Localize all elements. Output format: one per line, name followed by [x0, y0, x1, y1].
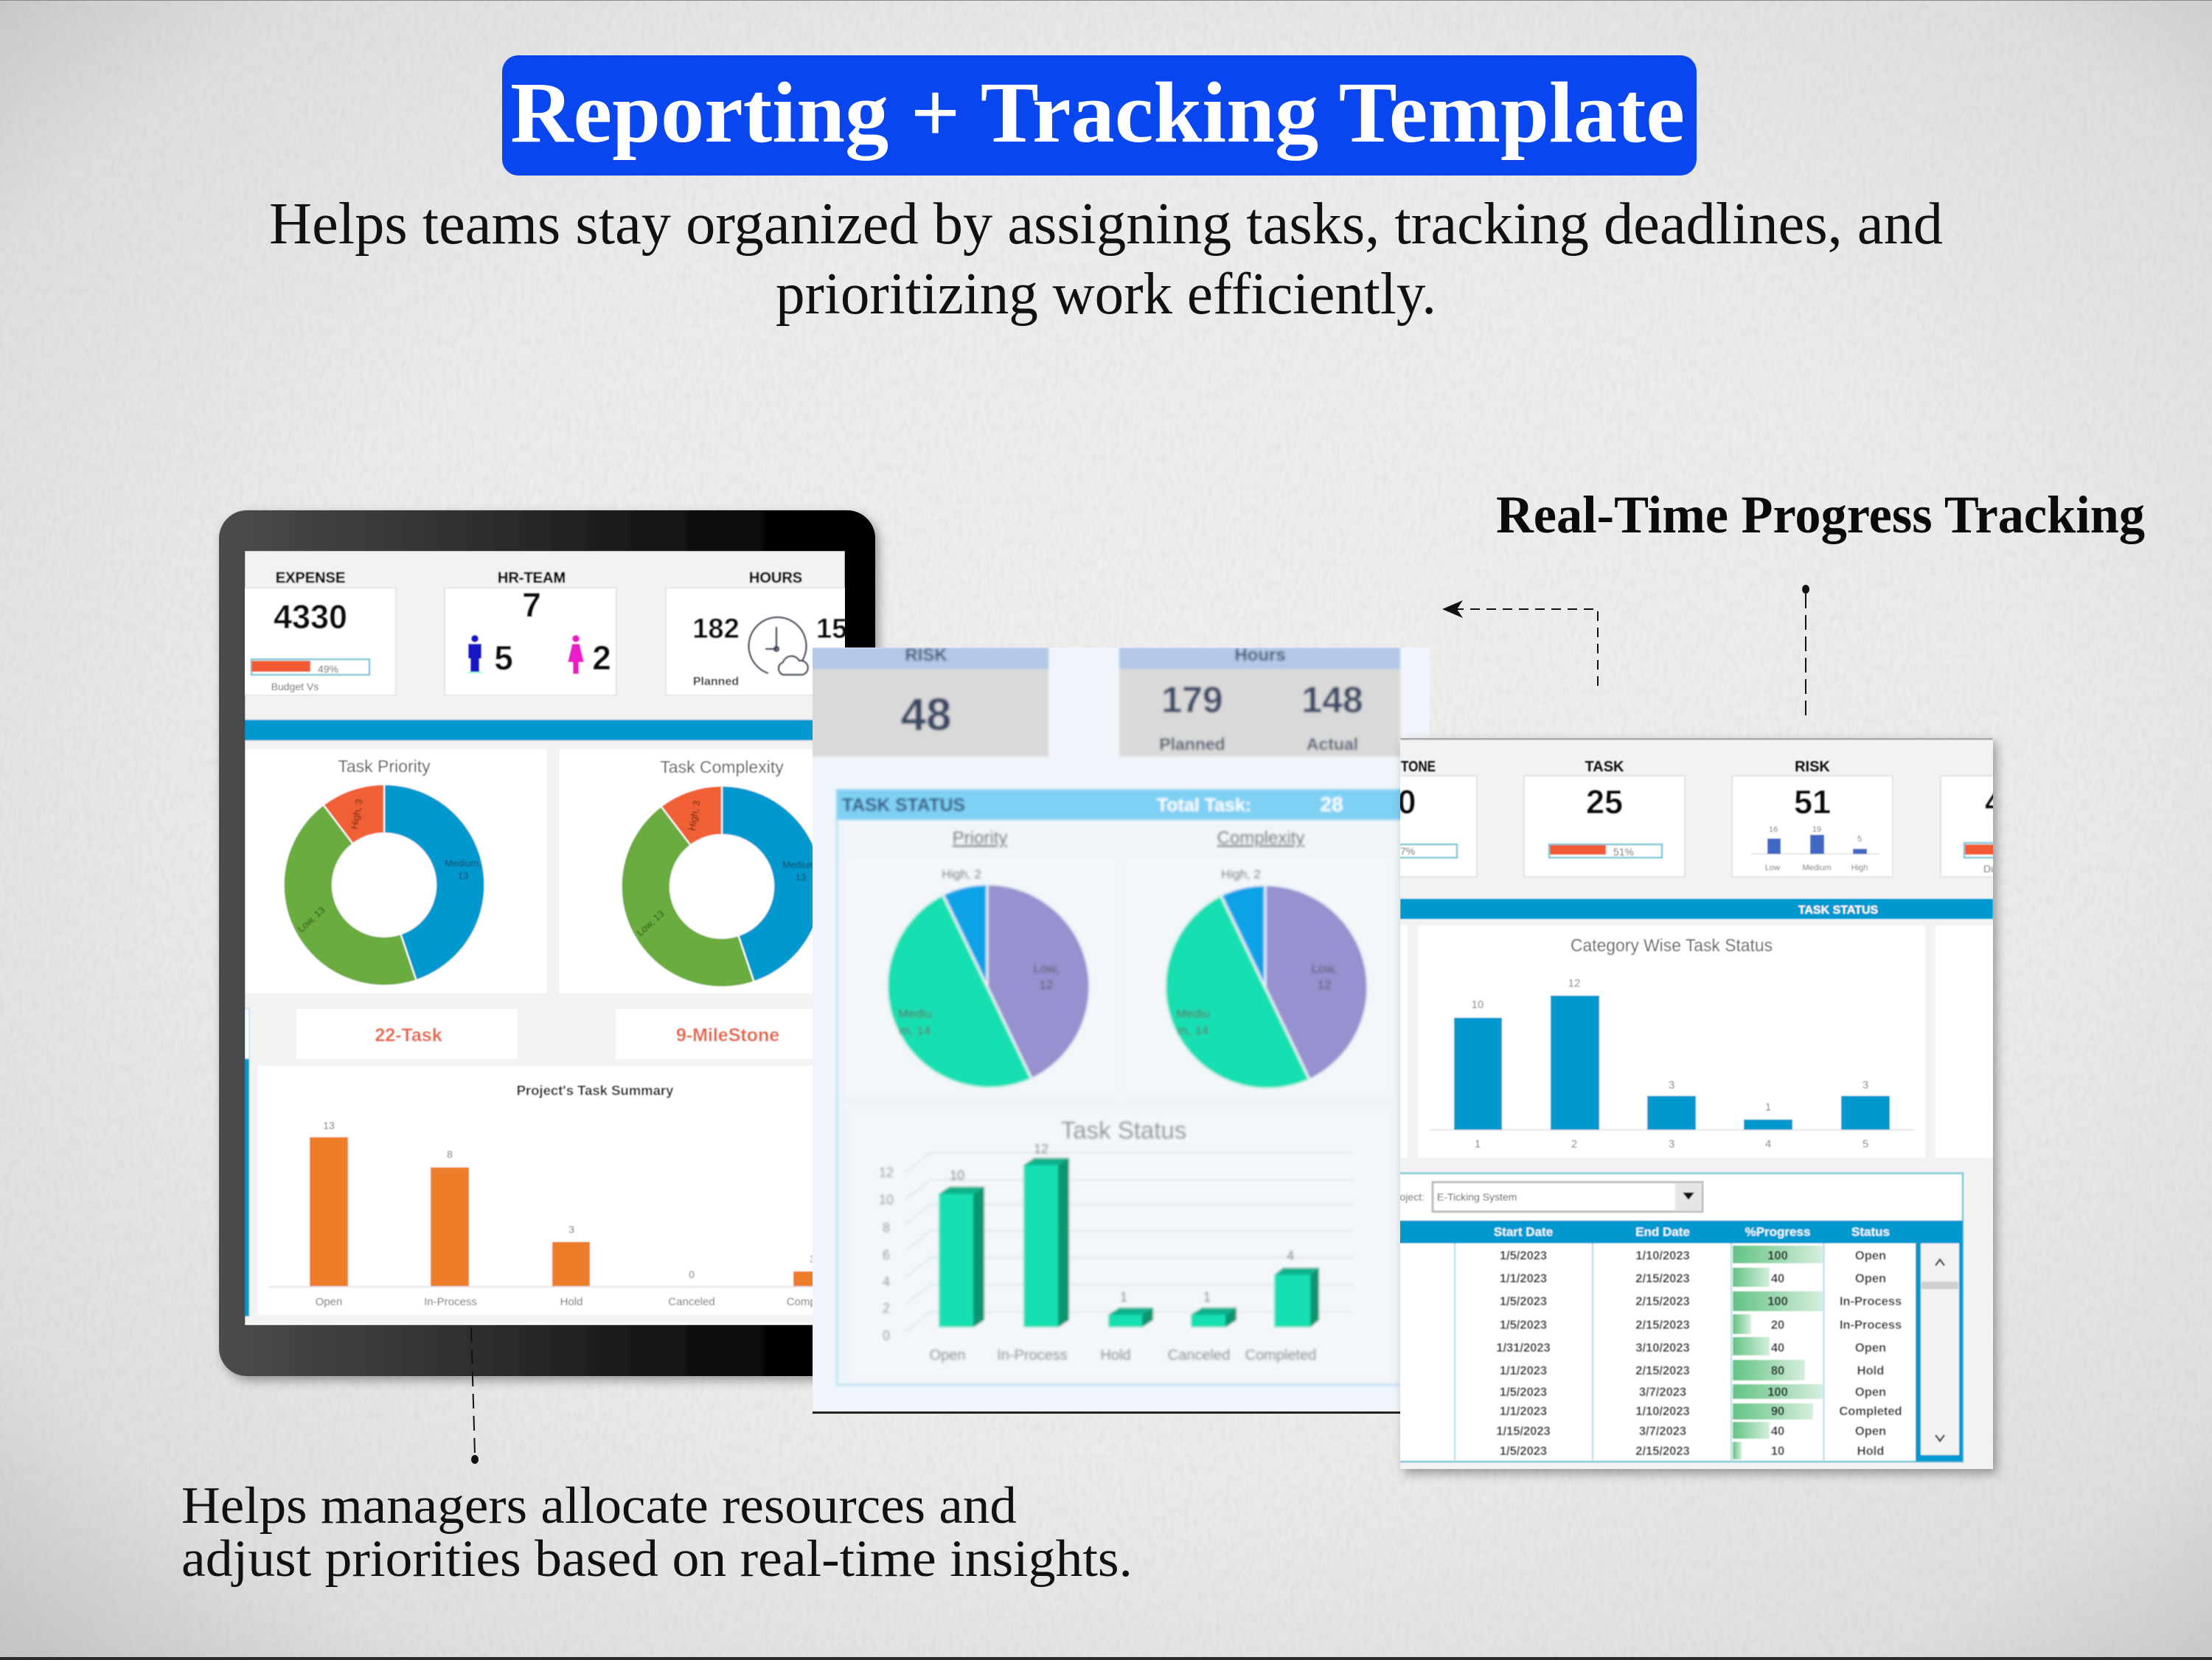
- table rows: 100: [1767, 1295, 1788, 1308]
- KPI: risk with mini bars: 19: [1812, 825, 1821, 834]
- KPI: task: 51%: [1613, 846, 1634, 858]
- 3D bar chart: task status: 8: [883, 1220, 890, 1235]
- caption: helps managers: Helps managers allocate resources and: [181, 1477, 1017, 1535]
- KPI: hours: 148: [1301, 679, 1363, 720]
- complexity pie chart: Low,: [1312, 962, 1337, 976]
- card: expense: EXPENSE: [276, 570, 345, 586]
- KPI: task: [1524, 759, 1685, 877]
- 3D bar chart: task status: Open: [930, 1347, 965, 1364]
- panel: task priority donut: [245, 749, 547, 993]
- KPI: task: TASK: [1585, 759, 1624, 775]
- panel: category wise bar chart: 3: [1863, 1079, 1868, 1091]
- panel: project's task summary bar chart: 3: [810, 1253, 815, 1265]
- table rows: 2/15/2023: [1635, 1445, 1690, 1458]
- table rows: 1/1/2023: [1500, 1405, 1547, 1418]
- panel: project's task summary bar chart: 8: [447, 1148, 453, 1160]
- table rows: 1/5/2023: [1500, 1295, 1547, 1308]
- table rows: 1/1/2023: [1500, 1364, 1547, 1378]
- panel: right dashboard: [1386, 737, 2007, 1469]
- arrow: dashed connector to middle panel: [1442, 600, 1598, 686]
- KPI: hours: 179: [1161, 679, 1223, 720]
- 3D bar chart: task status: 4: [883, 1274, 890, 1289]
- 3D bar chart: task status: Completed: [1245, 1347, 1316, 1364]
- priority pie chart: 12: [1040, 978, 1053, 992]
- 3D bar chart: task status: 1: [1203, 1290, 1211, 1305]
- KPI: risk with mini bars: 16: [1769, 825, 1778, 834]
- table rows: Open: [1855, 1249, 1886, 1263]
- table rows: 1/1/2023: [1500, 1272, 1547, 1285]
- panel: project task table: Project:: [1390, 1191, 1425, 1203]
- KPI: risk with mini bars: [1732, 759, 1893, 877]
- panel: project's task summary bar chart: In-Process: [424, 1296, 477, 1308]
- panel: task priority donut: Medium,: [445, 858, 481, 869]
- panel: project task table: Start Date: [1494, 1225, 1553, 1239]
- KPI: hours: Planned: [1159, 735, 1225, 754]
- panel: task complexity donut: High, 3: [686, 799, 702, 832]
- icon: male figure: [467, 635, 482, 673]
- 3D bar chart: task status: 10: [950, 1168, 964, 1183]
- heading: real-time progress tracking: Real-Time Progress Tracking: [1496, 485, 2145, 544]
- KPI: milestone: TONE: [1401, 759, 1436, 775]
- card: task count: [296, 1009, 518, 1059]
- 3D bar chart: task status: 4: [1287, 1249, 1294, 1263]
- table rows: 2/15/2023: [1635, 1295, 1690, 1308]
- panel: category wise bar chart: [1418, 925, 1925, 1158]
- 3D bar chart: task status: Canceled: [1168, 1347, 1230, 1364]
- table rows: In-Process: [1840, 1295, 1902, 1308]
- priority pie chart: Mediu: [898, 1007, 932, 1021]
- KPI: hours: Hours: [1234, 645, 1286, 665]
- card: expense: [243, 570, 396, 695]
- table rows: 2/15/2023: [1635, 1319, 1690, 1332]
- panel: project's task summary bar chart: 3: [568, 1223, 574, 1235]
- KPI: hours: [1119, 645, 1400, 757]
- complexity pie chart: m, 14: [1178, 1024, 1208, 1038]
- 3D bar chart: task status: Hold: [1100, 1347, 1131, 1364]
- complexity pie chart: 12: [1318, 978, 1331, 992]
- KPI: risk with mini bars: RISK: [1795, 759, 1830, 775]
- table rows: 1/5/2023: [1500, 1249, 1547, 1263]
- progress bars: [1733, 1246, 1823, 1459]
- KPI: risk with mini bars: 51: [1794, 783, 1831, 821]
- panel: task complexity donut: Medium,: [782, 859, 819, 870]
- panel: task priority donut: High, 3: [349, 798, 364, 830]
- 3D bar chart: task status: In-Process: [997, 1347, 1068, 1364]
- KPI: risk with mini bars: 5: [1857, 835, 1862, 844]
- KPI: risk: RISK: [905, 645, 947, 665]
- KPI: risk with mini bars: High: [1851, 864, 1868, 872]
- table rows: 2/15/2023: [1635, 1272, 1690, 1285]
- panel: category wise bar chart: 1: [1475, 1138, 1481, 1150]
- panel: project task table: End Date: [1635, 1225, 1690, 1239]
- table rows: 10: [1771, 1445, 1784, 1458]
- title banner: Reporting + Tracking Template: [510, 64, 1685, 161]
- KPI: risk: [811, 645, 1048, 757]
- tablet screen: [243, 551, 863, 1325]
- complexity pie chart: Mediu: [1176, 1007, 1210, 1021]
- tablet dashboard: [219, 510, 875, 1376]
- panel: category wise bar chart: 1: [1765, 1101, 1771, 1114]
- KPI: hours: Actual: [1307, 735, 1358, 754]
- section band: task status: TASK STATUS: [1798, 904, 1879, 917]
- table rows: Open: [1855, 1272, 1886, 1285]
- panel: project's task summary bar chart: Project's Task Summary: [517, 1083, 674, 1098]
- 3D bar chart: task status: 12: [879, 1165, 894, 1180]
- panel: project's task summary bar chart: 0: [689, 1268, 695, 1280]
- table rows: 40: [1771, 1341, 1784, 1355]
- panel: middle dashboard: [811, 645, 1430, 1414]
- table rows: 40: [1771, 1425, 1784, 1438]
- left edge accent: [245, 1009, 249, 1316]
- caption: helps managers: [181, 1477, 1133, 1588]
- section band: task status: [1400, 899, 1993, 919]
- card: hours: 182: [692, 614, 740, 645]
- panel: category wise bar chart: Category Wise Task Status: [1571, 936, 1773, 956]
- panel: task status box: Total Task:: [1157, 795, 1251, 816]
- panel: task complexity donut: Task Complexity: [660, 757, 784, 777]
- KPI: risk with mini bars: Medium: [1802, 864, 1832, 872]
- panel: project's task summary bar chart: Open: [316, 1296, 342, 1308]
- section band: [245, 720, 820, 740]
- panel: project's task summary bar chart: 13: [323, 1119, 335, 1131]
- panel: category wise bar chart: 12: [1568, 977, 1580, 990]
- card: HR team: [445, 570, 616, 695]
- panel: task priority donut: Low, 13: [295, 904, 327, 934]
- card: milestone count: 9-MileStone: [676, 1025, 779, 1046]
- panel: task complexity donut: Low, 13: [634, 908, 667, 938]
- table rows: 3/7/2023: [1639, 1386, 1686, 1399]
- card: hours: HOURS: [749, 570, 802, 586]
- subtitle: Helps teams stay organized by assigning tasks, tracking deadlines, and: [269, 192, 1943, 257]
- table rows: Open: [1855, 1425, 1886, 1438]
- table rows: Open: [1855, 1386, 1886, 1399]
- priority pie chart: High, 2: [942, 867, 981, 881]
- KPI: cut-off card: [1941, 776, 2007, 877]
- KPI: milestone: 0: [1397, 783, 1416, 821]
- panel: project's task summary bar chart: Canceled: [668, 1296, 715, 1308]
- panel: task complexity donut: 13: [796, 872, 806, 883]
- table rows: Hold: [1857, 1445, 1884, 1458]
- table rows: 1/5/2023: [1500, 1319, 1547, 1332]
- card: HR team: 7: [522, 586, 541, 624]
- panel: category wise bar chart: 10: [1472, 999, 1484, 1011]
- card: HR team: 5: [494, 639, 513, 677]
- panel: task status box: TASK STATUS: [842, 795, 965, 816]
- card: expense: 4330: [274, 598, 347, 636]
- KPI: milestone: [1386, 759, 1477, 877]
- table rows: In-Process: [1840, 1319, 1902, 1332]
- table rows: 90: [1771, 1405, 1784, 1418]
- table rows: Completed: [1839, 1405, 1902, 1418]
- panel: project's task summary bar chart: Hold: [560, 1296, 582, 1308]
- 3D bar chart: task status: 2: [883, 1301, 890, 1316]
- card: milestone count: [616, 1009, 837, 1059]
- 3D bar chart: task status: Task Status: [1061, 1116, 1186, 1144]
- KPI: milestone: 7%: [1400, 845, 1415, 857]
- card: hours: Planned: [693, 676, 739, 688]
- table rows: 1/10/2023: [1635, 1405, 1690, 1418]
- KPI: risk with mini bars: Low: [1765, 864, 1780, 872]
- panel: category wise bar chart: 5: [1863, 1138, 1868, 1150]
- panel: category wise bar chart: 3: [1669, 1138, 1674, 1150]
- panel: project task table: Status: [1851, 1225, 1890, 1239]
- table rows: 1/5/2023: [1500, 1386, 1547, 1399]
- complexity pie chart: [1124, 856, 1394, 1098]
- panel: project task table: %Progress: [1745, 1225, 1810, 1239]
- panel: project's task summary bar chart: Completed: [787, 1296, 840, 1308]
- connector: dashed line from tablet to caption: [471, 1327, 479, 1464]
- panel: category wise bar chart: 4: [1765, 1138, 1771, 1150]
- KPI: risk: 48: [901, 690, 951, 740]
- 3D bar chart: task status: 0: [883, 1328, 890, 1343]
- table rows: 1/31/2023: [1496, 1341, 1551, 1355]
- priority pie chart: Low,: [1034, 962, 1059, 976]
- KPI: task: 25: [1586, 783, 1623, 821]
- table rows: 100: [1767, 1249, 1788, 1263]
- table rows: 1/5/2023: [1500, 1445, 1547, 1458]
- table rows: Open: [1855, 1341, 1886, 1355]
- panel: category wise bar chart: 2: [1571, 1138, 1577, 1150]
- 3D bar chart: task status: 12: [1034, 1142, 1048, 1156]
- card: task count: 22-Task: [375, 1025, 442, 1046]
- 3D bar chart: task status: 6: [883, 1248, 890, 1263]
- card: hours: 150: [816, 614, 863, 645]
- priority pie chart: [844, 856, 1118, 1098]
- table rows: 40: [1771, 1272, 1784, 1285]
- panel: task priority donut: Task Priority: [338, 757, 431, 776]
- table rows: 2/15/2023: [1635, 1364, 1690, 1378]
- icon: female figure: [568, 635, 584, 674]
- table rows: Hold: [1857, 1364, 1884, 1378]
- card: HR team: 2: [592, 639, 611, 677]
- panel: task status box: [837, 790, 1427, 1385]
- panel: category wise bar chart: 3: [1669, 1079, 1674, 1091]
- card: HR team: HR-TEAM: [498, 570, 566, 586]
- card: expense: Budget Vs: [271, 681, 319, 692]
- 3D bar chart: task status: 10: [879, 1192, 894, 1207]
- table rows: 100: [1767, 1386, 1788, 1399]
- panel: task status box: Complexity: [1217, 828, 1304, 848]
- table rows: 3/7/2023: [1639, 1425, 1686, 1438]
- table rows: [1496, 1249, 1902, 1458]
- table rows: 1/15/2023: [1496, 1425, 1551, 1438]
- connector: dashed line with dot to right panel: [1802, 585, 1809, 721]
- project dropdown: [1433, 1182, 1703, 1212]
- 3D bar chart: task status: 1: [1120, 1290, 1127, 1305]
- card: hours: [666, 570, 863, 695]
- complexity pie chart: High, 2: [1221, 867, 1261, 881]
- 3D bar chart: task status: [848, 1108, 1391, 1382]
- KPI: cut-off card: 4: [1985, 783, 2003, 821]
- project dropdown: E-Ticking System: [1437, 1191, 1517, 1203]
- subtitle: prioritizing work efficiently.: [776, 262, 1436, 327]
- priority pie chart: m, 14: [900, 1024, 931, 1038]
- panel: project's task summary bar chart: [257, 1066, 848, 1315]
- card: expense: 49%: [318, 663, 338, 675]
- KPI: cut-off card: Du: [1983, 863, 1997, 875]
- scrollbar: [1916, 1243, 1963, 1462]
- table rows: 20: [1771, 1319, 1784, 1332]
- panel: task complexity donut: [560, 749, 813, 993]
- panel: task status box: 28: [1320, 793, 1343, 816]
- table rows: 3/10/2023: [1635, 1341, 1690, 1355]
- panel: project task table: [1386, 1173, 1963, 1462]
- panel: task status box: Priority: [953, 828, 1007, 848]
- subtitle: [269, 192, 1943, 327]
- panel: task priority donut: 13: [458, 870, 468, 881]
- icon: clock with cloud: [749, 617, 808, 675]
- table rows: 80: [1771, 1364, 1784, 1378]
- table rows: 1/10/2023: [1635, 1249, 1690, 1263]
- caption: helps managers: adjust priorities based on real-time insights.: [181, 1530, 1133, 1588]
